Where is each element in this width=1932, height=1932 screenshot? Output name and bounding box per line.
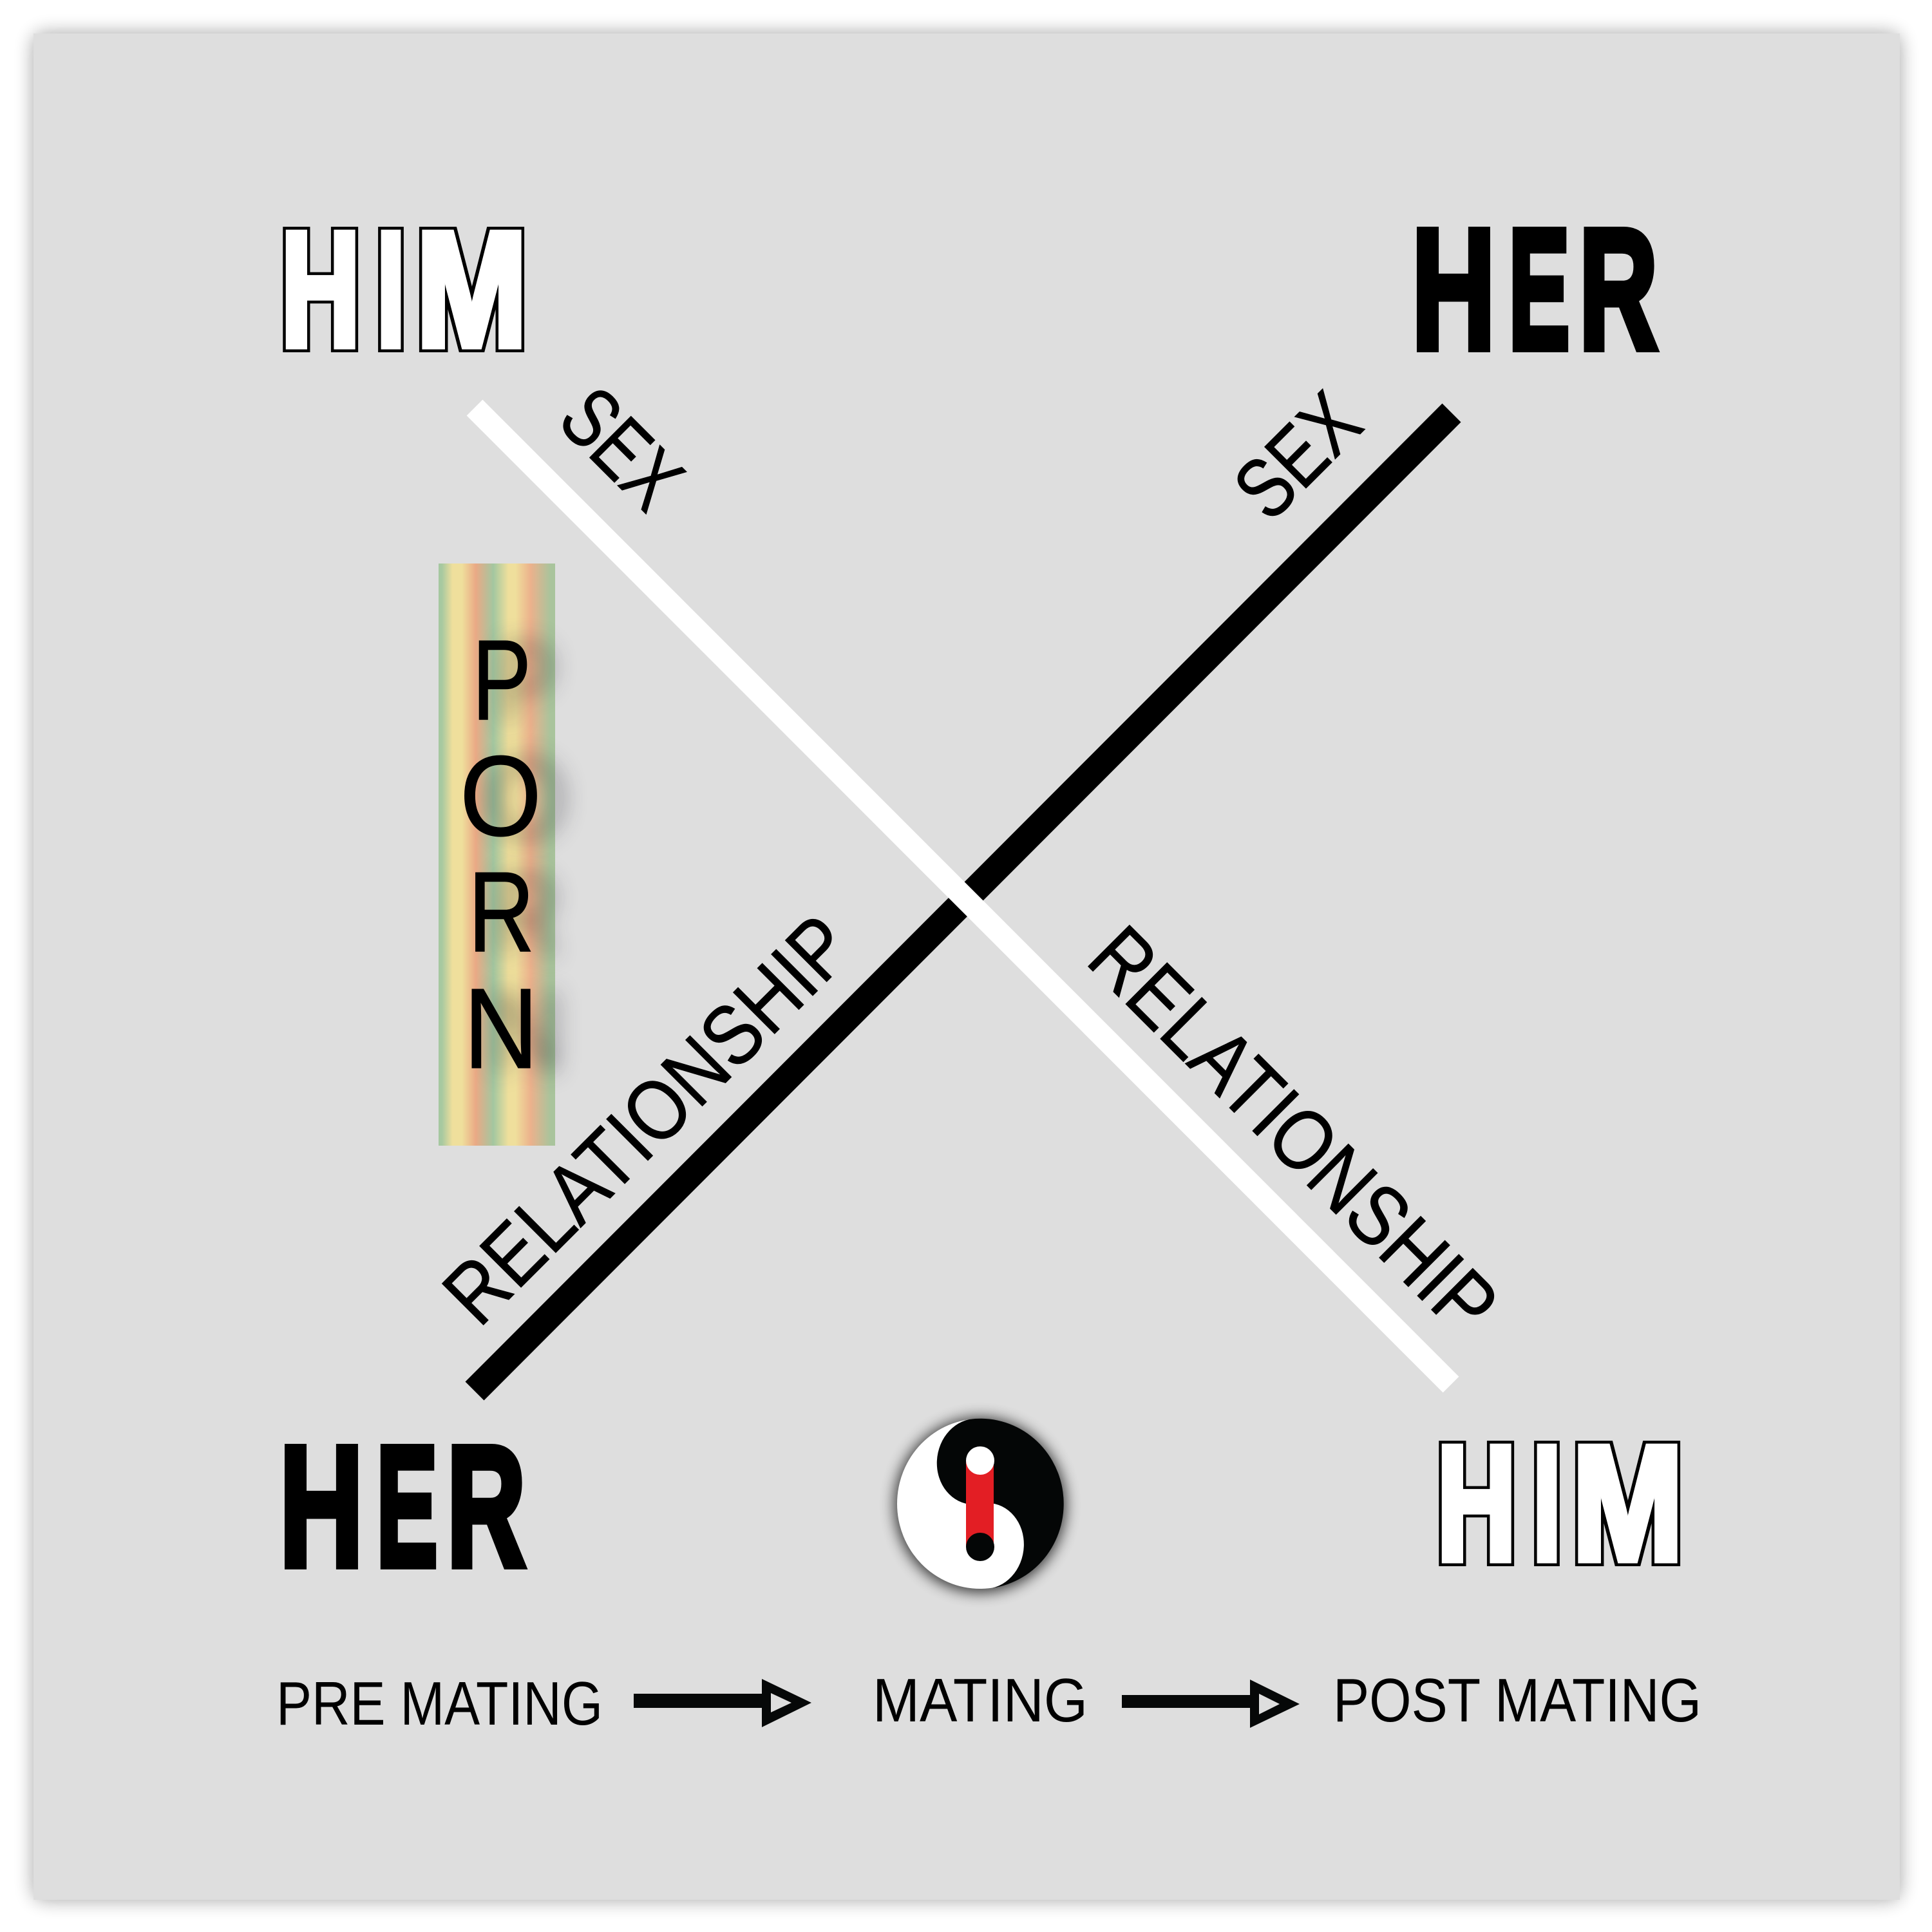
line: her sex to relationship (black diagonal) — [475, 413, 1452, 1391]
heading: her bottom left: E — [376, 1411, 438, 1602]
panel: porn bar — [439, 564, 555, 1146]
label: sex on white line: SEX — [542, 369, 701, 528]
heading: her bottom left: R — [447, 1411, 526, 1602]
heading: her bottom left — [279, 1411, 526, 1602]
label: relationship on black line: RELATIONSHIP — [425, 897, 870, 1342]
gradient bar — [439, 564, 555, 1146]
heading: him bottom right: H — [1437, 1411, 1516, 1596]
heading: him bottom right — [1437, 1411, 1683, 1596]
heading: him top left: H — [281, 197, 359, 382]
heading: her top right — [1412, 194, 1658, 385]
heading: her bottom left: H — [279, 1411, 363, 1602]
label: relationship on white line: RELATIONSHIP — [1071, 908, 1516, 1353]
line: him sex to relationship (white diagonal) — [475, 408, 1451, 1385]
icon: yin yang with red bar — [895, 1417, 1066, 1593]
letter R: R — [468, 848, 535, 976]
letter O: O — [460, 732, 542, 860]
heading: him top left — [281, 197, 527, 382]
label: pre mating: PRE MATING — [276, 1669, 603, 1738]
heading: him bottom right: M — [1572, 1411, 1683, 1596]
label: sex on black line: SEX — [1216, 374, 1379, 537]
heading: her top right: E — [1508, 194, 1570, 385]
heading: him top left: I — [377, 197, 404, 382]
letter P: P — [472, 616, 531, 744]
arrow: mating to post mating — [1122, 1680, 1300, 1728]
label: mating: MATING — [873, 1666, 1088, 1735]
heading: her top right: R — [1579, 194, 1658, 385]
letter N: N — [464, 965, 538, 1092]
heading: her top right: H — [1412, 194, 1495, 385]
label: post mating: POST MATING — [1333, 1666, 1701, 1735]
heading: him bottom right: I — [1533, 1411, 1560, 1596]
arrow: pre mating to mating — [634, 1679, 811, 1727]
heading: him top left: M — [416, 197, 527, 382]
